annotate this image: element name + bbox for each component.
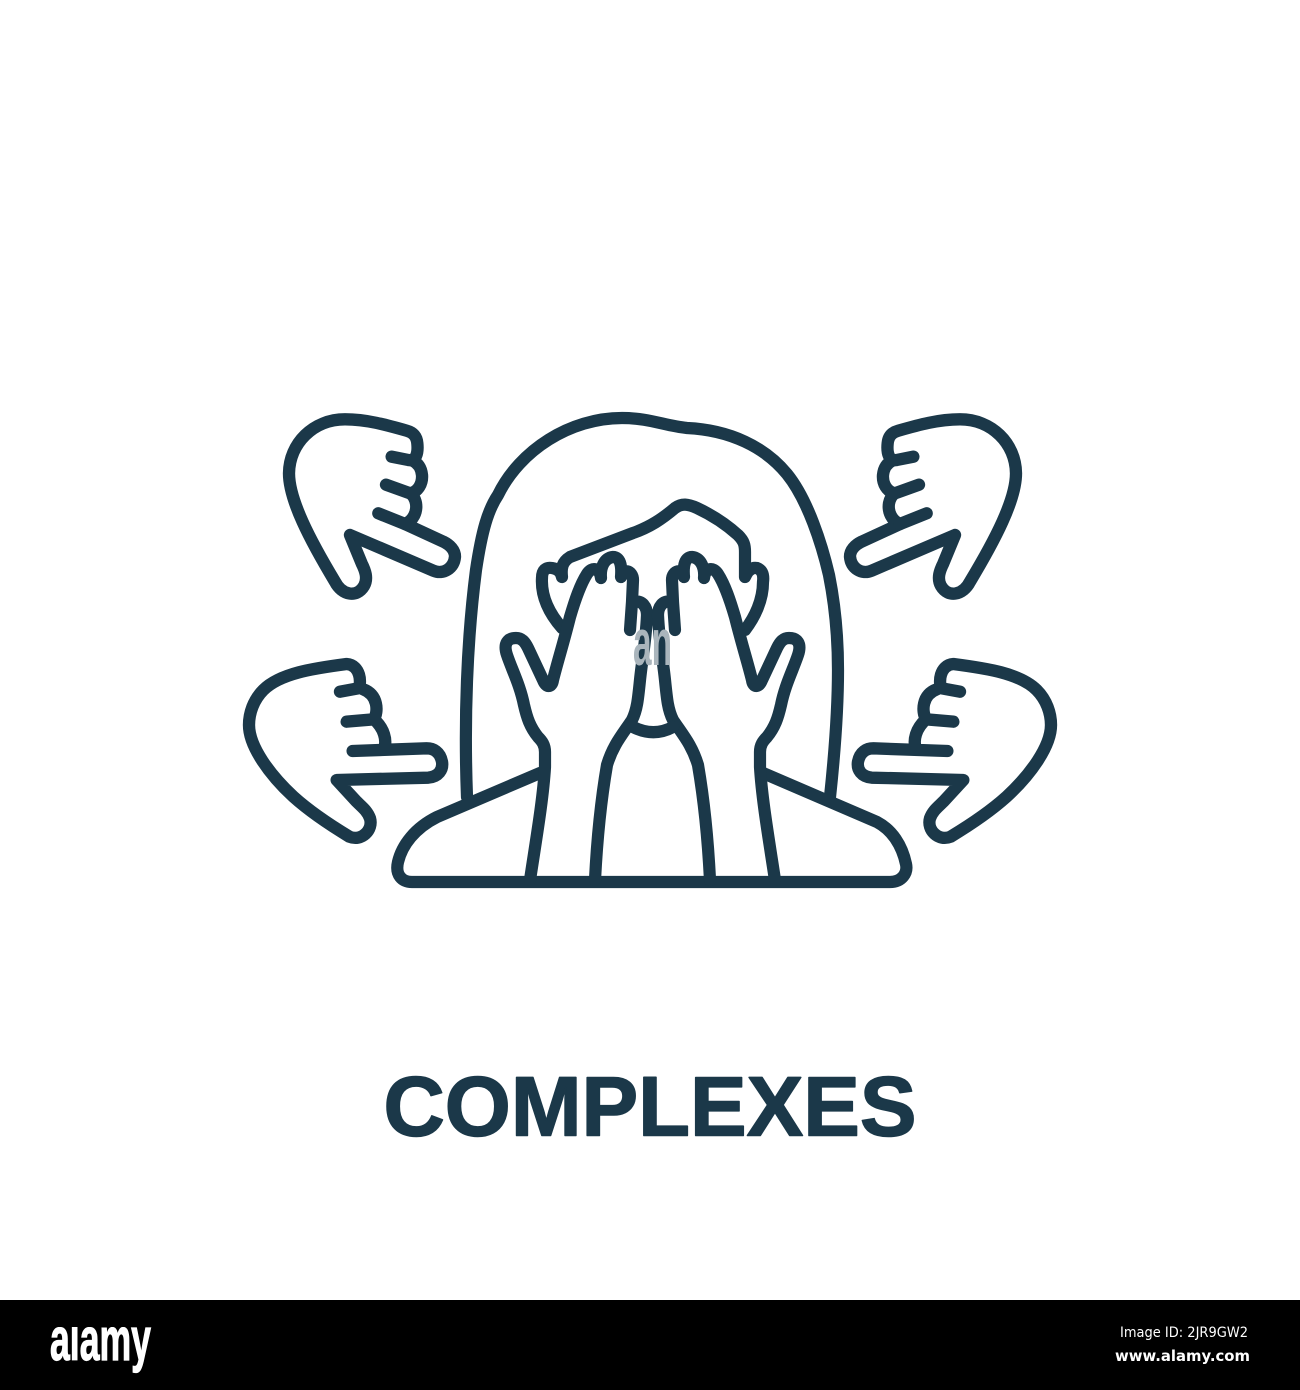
shoulders and base xyxy=(397,773,906,882)
neck xyxy=(633,727,673,732)
title: COMPLEXES xyxy=(384,1060,916,1154)
footer bar xyxy=(0,1300,1300,1390)
right hand and arm xyxy=(658,557,799,880)
hair xyxy=(466,418,838,797)
icon: pointing hand bottom right xyxy=(858,664,1051,838)
icon: person xyxy=(397,418,906,882)
logo: alamy xyxy=(50,1306,151,1373)
image id: Image ID: 2JR9GW2 xyxy=(1120,1325,1248,1341)
icon: pointing hand bottom left xyxy=(249,664,442,838)
icon: pointing hand top left xyxy=(289,419,455,594)
watermark fragment: an xyxy=(633,605,672,679)
website: www.alamy.com xyxy=(1115,1347,1250,1365)
icon: person covering face with pointing hands xyxy=(249,418,1051,882)
face and fringe xyxy=(542,505,763,630)
left hand and arm xyxy=(506,557,647,880)
icon: pointing hand top right xyxy=(850,419,1016,594)
